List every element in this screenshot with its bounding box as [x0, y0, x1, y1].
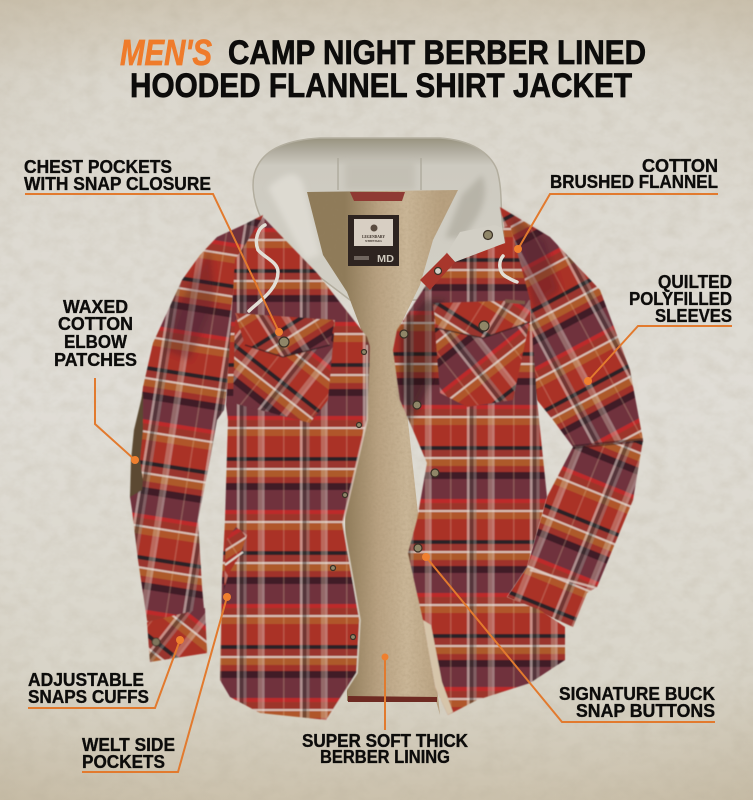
hood collar tab	[420, 225, 505, 290]
callout: chest pockets: CHEST POCKETS	[24, 157, 172, 177]
callout: chest pockets	[24, 157, 283, 336]
callout: elbow patches: PATCHES	[54, 350, 137, 370]
left pocket flap	[235, 313, 335, 357]
right chest pocket	[433, 299, 530, 407]
left sleeve	[130, 215, 263, 662]
callout: buck snap buttons: SNAP BUTTONS	[576, 701, 715, 721]
right cuff	[507, 567, 597, 627]
callout: buck snap buttons	[422, 553, 715, 722]
jacket illustration	[130, 138, 643, 720]
left chest pocket	[233, 313, 335, 423]
right front panel	[393, 225, 565, 715]
callout: quilted sleeves	[584, 272, 732, 385]
callout: elbow patches: ELBOW	[64, 332, 127, 352]
callout: berber lining: SUPER SOFT THICK	[302, 731, 468, 751]
callout: berber lining: BERBER LINING	[320, 747, 450, 767]
callout: quilted sleeves: SLEEVES	[655, 306, 732, 326]
brand tag: MD	[377, 254, 394, 265]
hood	[253, 138, 505, 300]
title accent: MEN'S: MEN'S	[120, 32, 212, 73]
callout: welt side pockets	[82, 593, 231, 772]
callout: quilted sleeves: QUILTED	[658, 272, 732, 292]
elbow patch	[130, 392, 143, 497]
callout: adjustable cuffs: ADJUSTABLE	[28, 670, 144, 690]
callout: cotton brushed flannel	[514, 156, 718, 253]
right pocket flap	[433, 300, 530, 338]
callout: cotton brushed flannel: BRUSHED FLANNEL	[550, 172, 718, 192]
callout: berber lining	[302, 654, 468, 767]
callout: elbow patches	[54, 297, 139, 464]
callout: quilted sleeves: POLYFILLED	[629, 289, 732, 309]
snap buttons	[279, 230, 492, 640]
callout: adjustable cuffs: SNAPS CUFFS	[28, 687, 149, 707]
left front panel	[220, 217, 370, 720]
title: HOODED FLANNEL SHIRT JACKET	[130, 67, 632, 105]
drawstrings	[249, 225, 517, 311]
title	[120, 32, 646, 105]
callout: elbow patches: COTTON	[58, 314, 133, 334]
left side welt pocket	[224, 527, 247, 590]
callout: elbow patches: WAXED	[63, 297, 128, 317]
callout: buck snap buttons: SIGNATURE BUCK	[559, 684, 715, 704]
brand tag: WHITETAILS	[365, 240, 382, 243]
title: CAMP NIGHT BERBER LINED	[228, 34, 646, 72]
cuff snap	[152, 638, 160, 646]
right sleeve	[500, 207, 643, 627]
callout: adjustable cuffs	[28, 636, 184, 708]
callout: welt side pockets: WELT SIDE	[82, 735, 175, 755]
callout: welt side pockets: POCKETS	[82, 752, 165, 772]
callout: chest pockets: WITH SNAP CLOSURE	[24, 174, 211, 194]
berber lining	[307, 190, 458, 715]
brand tag	[348, 215, 399, 266]
brand tag: LEGENDARY	[362, 235, 385, 239]
callout: cotton brushed flannel: COTTON	[642, 156, 718, 176]
